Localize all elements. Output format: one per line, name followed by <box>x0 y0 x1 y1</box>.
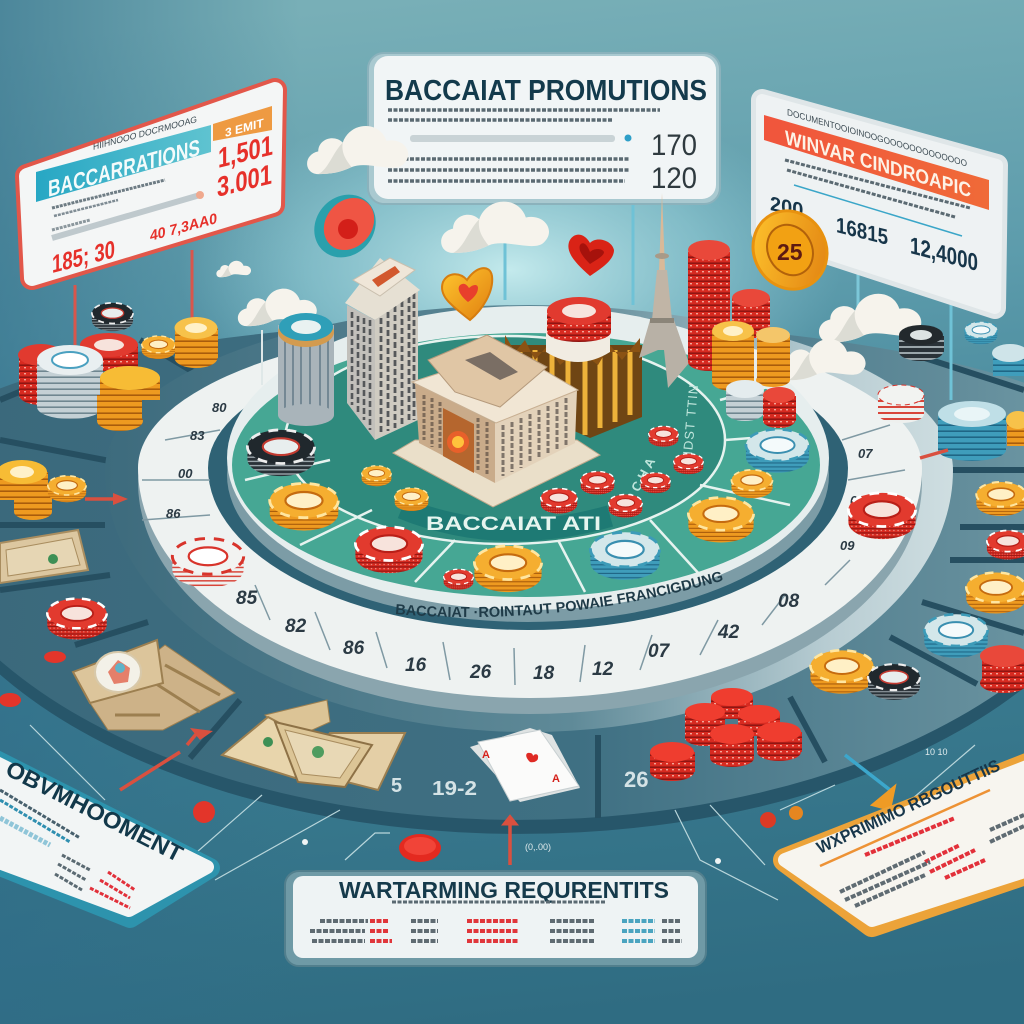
subtitle <box>392 900 605 904</box>
segment numbers: 26 <box>624 767 648 792</box>
fine print <box>785 160 970 217</box>
money: left edge banknote <box>0 530 88 583</box>
red chip cluster <box>650 688 802 781</box>
sign: bottom right wxpriming <box>785 756 1024 925</box>
mid ring <box>105 305 953 732</box>
value: 12,4000: 12,4000 <box>910 232 978 277</box>
title: WXPRIMIMO RBGOUTTIIS <box>814 756 1003 858</box>
number band with day cells: 80 <box>212 400 227 415</box>
banner: orange tag <box>213 106 272 141</box>
table curved label right: IDST TTIN <box>680 384 701 455</box>
sign: baccarrations offer <box>27 90 275 279</box>
chips: right edge <box>810 482 1024 700</box>
timeline <box>794 185 962 236</box>
number band with day cells: 16 <box>405 655 427 676</box>
number band with day cells: 07 <box>858 446 873 461</box>
segment numbers: 19-2 <box>432 778 477 800</box>
money: banknote pile <box>222 700 405 790</box>
sign: baccarat promotions <box>368 53 720 204</box>
white platform <box>227 306 829 622</box>
small caption: HIIHNOOO DOCRMOOAG <box>93 114 197 152</box>
progress bar <box>410 134 632 142</box>
icon: gold heart <box>442 268 492 320</box>
segment numbers: 5 <box>391 775 402 797</box>
arrows <box>85 450 948 865</box>
building: golden palace <box>505 297 642 438</box>
building: cylinder tower <box>278 313 334 426</box>
title: OBVMHOOMENT <box>2 755 187 867</box>
building: eiffel tower <box>639 193 689 388</box>
green baccarat table <box>232 333 820 597</box>
fine print and slider <box>52 180 204 238</box>
value: 170: 170 <box>651 129 697 162</box>
number band with day cells <box>138 323 922 714</box>
floor tokens <box>0 651 948 864</box>
number band with day cells: 86 <box>166 506 181 521</box>
sign: bottom left obvmhooment <box>0 752 210 918</box>
building: central temple <box>393 335 600 507</box>
value: 1,501: 1,501 <box>218 130 273 175</box>
ring caption: BACCAIAT ·ROINTAUT POWAIE FRANCIGDUNG <box>396 572 722 617</box>
sign: wartarming requirements <box>285 871 706 966</box>
money: banknotes with chip emblem <box>73 640 235 730</box>
background left shading <box>0 0 300 1024</box>
chip stacks: far right <box>878 322 1024 461</box>
fine print <box>0 790 135 908</box>
playing cards: A <box>552 773 560 785</box>
value: 185; 30: 185; 30 <box>52 236 115 279</box>
sign: winvar offer <box>762 100 997 308</box>
chip stacks: top right <box>688 240 796 428</box>
title: BACCAIAT PROMUTIONS <box>385 75 707 107</box>
number band with day cells: 26 <box>469 662 492 683</box>
banner: red title: WINVAR CINDROAPIC <box>785 127 971 202</box>
value: 200: 200 <box>770 193 803 222</box>
number band with day cells: 82 <box>285 616 307 637</box>
connector lines on floor <box>30 725 975 900</box>
icon: gold coin 25: 25 <box>777 239 803 265</box>
number band with day cells: 08 <box>778 591 800 612</box>
segment numbers <box>391 767 648 800</box>
orange underline <box>820 790 990 866</box>
number band with day cells: 00 <box>178 466 193 481</box>
floor tokens: (0,.00) <box>525 842 551 852</box>
playing cards <box>470 728 580 802</box>
value: 40 7,3AA0: 40 7,3AA0 <box>150 210 217 245</box>
icon: red button <box>302 182 388 270</box>
clouds <box>216 126 921 380</box>
fine print <box>840 815 1024 906</box>
number band with day cells: 86 <box>343 638 365 659</box>
chips: left edge <box>0 460 107 639</box>
banner: orange tag: 3 EMIT <box>225 116 264 140</box>
value: 16815: 16815 <box>836 212 888 250</box>
table curved label: OCHA <box>621 455 658 506</box>
value: 120: 120 <box>651 162 697 195</box>
chip stacks: top left <box>18 303 218 431</box>
number band with day cells: 83 <box>190 428 205 443</box>
building: tall hotel <box>345 258 420 440</box>
floor tokens: 10 10 <box>925 747 948 757</box>
icon: gold coin 25 <box>739 198 841 302</box>
number band with day cells: 42 <box>717 622 740 643</box>
table caption: BACCAIAT ATI <box>426 514 601 535</box>
number band with day cells: 85 <box>236 588 258 609</box>
fine print <box>388 110 660 181</box>
number band with day cells: 07 <box>648 641 671 662</box>
number band with day cells: 12 <box>592 659 614 680</box>
number band with day cells: 08 <box>850 493 865 508</box>
icon: red heart <box>568 235 614 276</box>
requirement rows <box>310 921 682 941</box>
playing cards: A <box>482 749 490 761</box>
caption: DOCUMENTOOIOINOOGOOOOOOOOOOOOO <box>787 107 967 169</box>
value: 3.001: 3.001 <box>217 159 272 204</box>
chips: on table <box>172 426 916 592</box>
outer segmented ring <box>0 320 1024 834</box>
sign poles <box>75 200 951 400</box>
banner: teal title: BACCARRATIONS <box>48 134 200 202</box>
number band with day cells: 09 <box>840 538 855 553</box>
table caption band <box>402 508 610 530</box>
title: WARTARMING REQURENTITS <box>339 877 669 903</box>
background glow <box>180 100 840 440</box>
number band with day cells: 18 <box>533 663 555 684</box>
